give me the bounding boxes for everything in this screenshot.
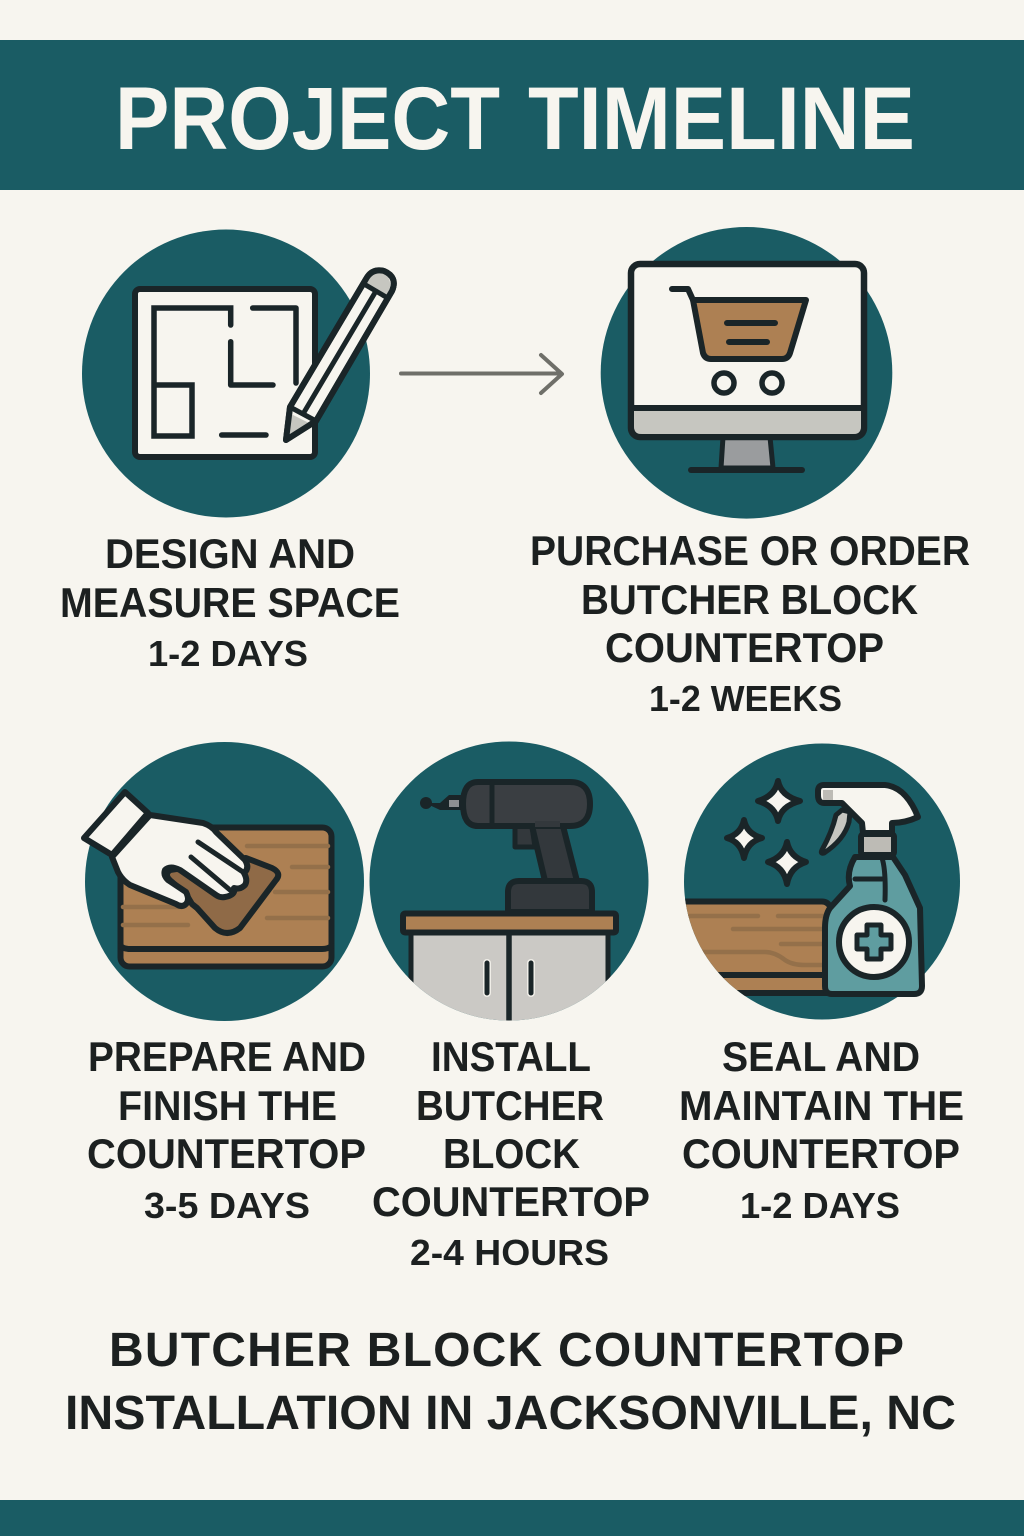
label: purchase or order butcher block countertop: PURCHASE OR ORDER — [530, 527, 970, 574]
label: seal and maintain the countertop: MAINTAIN THE — [679, 1082, 964, 1129]
step 3: prepare and finish — [84, 742, 366, 1226]
footer heading: INSTALLATION IN JACKSONVILLE, NC — [65, 1387, 956, 1440]
step 1: design and measure space — [60, 230, 400, 674]
step 4: install — [370, 742, 650, 1273]
label: prepare and finish the countertop: COUNTERTOP — [87, 1130, 366, 1177]
title: PROJECT — [115, 68, 500, 168]
arrow — [401, 355, 562, 393]
label: design and measure space: DESIGN AND — [105, 530, 355, 577]
footer heading: BUTCHER BLOCK COUNTERTOP — [109, 1324, 904, 1377]
label: install butcher block countertop: BLOCK — [443, 1130, 580, 1177]
label: install butcher block countertop: INSTALL — [431, 1033, 591, 1080]
title — [115, 68, 915, 168]
label: seal and maintain the countertop: COUNTERTOP — [682, 1130, 960, 1177]
icon: monitor with shopping cart — [601, 227, 892, 519]
icon: drill on cabinet — [370, 742, 648, 1040]
duration: 1-2 weeks: 1-2 WEEKS — [649, 678, 842, 719]
label: install butcher block countertop: COUNTERTOP — [372, 1178, 650, 1225]
duration: 1-2 days: 1-2 DAYS — [148, 633, 308, 674]
duration: 1-2 days: 1-2 DAYS — [740, 1185, 900, 1226]
icon: hand wiping board — [84, 742, 364, 1021]
footer band — [0, 1500, 1024, 1536]
label: install butcher block countertop — [372, 1033, 650, 1225]
label: prepare and finish the countertop — [87, 1033, 366, 1177]
duration: 3-5 days: 3-5 DAYS — [144, 1185, 310, 1226]
step 5: seal and maintain — [679, 744, 964, 1226]
title: TIMELINE — [528, 68, 915, 168]
duration: 2-4 hours: 2-4 HOURS — [410, 1232, 609, 1273]
label: design and measure space — [60, 530, 400, 626]
step 2: purchase or order — [530, 227, 970, 719]
label: design and measure space: MEASURE SPACE — [60, 579, 400, 626]
label: seal and maintain the countertop — [679, 1033, 964, 1177]
label: seal and maintain the countertop: SEAL AND — [722, 1033, 920, 1080]
label: prepare and finish the countertop: PREPARE AND — [88, 1033, 366, 1080]
label: purchase or order butcher block countertop: COUNTERTOP — [605, 624, 884, 671]
icon: floor plan and pencil — [82, 230, 394, 518]
label: install butcher block countertop: BUTCHER — [416, 1082, 604, 1129]
label: purchase or order butcher block countertop — [530, 527, 970, 671]
footer heading — [65, 1324, 956, 1440]
icon: spray bottle, sparkles and wood — [680, 744, 960, 1020]
title banner — [0, 40, 1024, 190]
label: prepare and finish the countertop: FINISH THE — [118, 1082, 337, 1129]
label: purchase or order butcher block countertop: BUTCHER BLOCK — [581, 576, 918, 623]
